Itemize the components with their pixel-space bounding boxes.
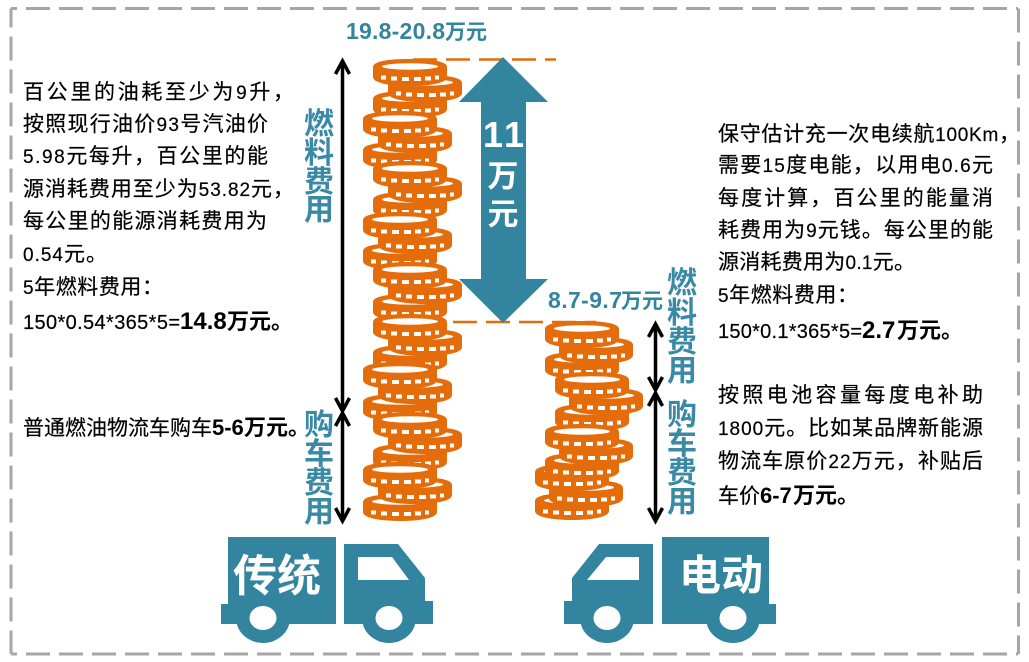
arrow: electric purchase cost xyxy=(648,393,662,521)
vertical label: traditional fuel cost xyxy=(304,108,334,227)
text block: electric purchase subsidy: 万元。 xyxy=(793,483,859,508)
text block: electric purchase subsidy: 按照电池容量每度电补助 xyxy=(718,384,983,407)
big double arrow: 11万元 difference: 11 xyxy=(483,114,527,155)
big double arrow: 11万元 difference xyxy=(459,57,548,323)
vertical label: electric fuel cost xyxy=(667,267,697,388)
text block: traditional purchase cost: 普通燃油物流车购车 xyxy=(23,417,212,440)
icon: electric truck xyxy=(564,537,776,643)
big double arrow: 11万元 difference: 元 xyxy=(488,197,518,232)
vertical label: electric purchase cost: 购 xyxy=(667,399,697,432)
icon: electric truck: 电动 xyxy=(679,552,763,599)
text block: traditional fuel cost explanation: 万元。 xyxy=(227,309,293,334)
text block: electric fuel cost explanation: 万元。 xyxy=(897,318,963,343)
text block: traditional purchase cost xyxy=(23,415,310,440)
text block: electric fuel cost explanation: 需要15度电能，以用电0.6元 xyxy=(718,154,993,177)
vertical label: electric fuel cost: 燃 xyxy=(667,267,697,300)
vertical label: traditional fuel cost: 料 xyxy=(304,137,334,170)
text block: electric purchase subsidy: 6-7 xyxy=(760,483,792,508)
text block: electric fuel cost explanation: 源消耗费用为0.1元。 xyxy=(718,251,915,274)
vertical label: electric fuel cost: 费 xyxy=(667,326,697,359)
text block: electric fuel cost explanation xyxy=(718,123,1020,344)
total label: electric: 8.7-9.7 xyxy=(548,287,622,313)
text block: electric fuel cost explanation: 保守估计充一次电续航100Km， xyxy=(718,123,1020,146)
text block: electric fuel cost explanation: 耗费用为9元钱。每公里的能 xyxy=(718,219,993,242)
text block: traditional fuel cost explanation: 百公里的油耗至少为9升， xyxy=(23,81,294,104)
coin stack: electric truck xyxy=(535,321,643,520)
arrow: traditional purchase cost xyxy=(336,413,350,521)
total label: electric: 万元 xyxy=(621,290,663,313)
icon: traditional truck xyxy=(221,537,433,643)
total label: traditional: 万元 xyxy=(445,21,487,44)
total label: traditional: 19.8-20.8 xyxy=(346,18,445,44)
vertical label: traditional purchase cost: 购 xyxy=(304,409,334,442)
text block: traditional fuel cost explanation: 5.98元每升，百公里的能 xyxy=(23,145,268,168)
vertical label: traditional purchase cost xyxy=(304,409,334,529)
text block: traditional fuel cost explanation: 0.54元。 xyxy=(23,243,107,266)
text block: electric purchase subsidy xyxy=(718,384,983,508)
orange dashed reference lines xyxy=(413,60,596,322)
text block: traditional fuel cost explanation: 14.8 xyxy=(180,308,227,335)
text block: traditional fuel cost explanation: 每公里的能源消耗费用为 xyxy=(23,210,267,233)
text block: traditional purchase cost: 5-6 xyxy=(212,415,244,440)
text block: traditional fuel cost explanation: 源消耗费用至少为53.82元， xyxy=(23,178,294,201)
text block: electric purchase subsidy: 1800元。比如某品牌新能源 xyxy=(718,417,983,440)
vertical label: electric purchase cost xyxy=(667,399,697,519)
vertical label: traditional fuel cost: 用 xyxy=(304,194,334,227)
vertical label: traditional purchase cost: 费 xyxy=(304,467,334,500)
text block: traditional fuel cost explanation: 150*0.54*365*5= xyxy=(23,312,180,334)
coin stack: traditional truck xyxy=(363,59,462,521)
icon: traditional truck: 传统 xyxy=(233,552,321,601)
text block: traditional fuel cost explanation: 按照现行油价93号汽油价 xyxy=(23,113,268,136)
vertical label: traditional fuel cost: 燃 xyxy=(304,108,334,141)
text block: electric purchase subsidy: 车价 xyxy=(718,485,760,508)
vertical label: traditional purchase cost: 用 xyxy=(304,496,334,529)
vertical label: electric purchase cost: 费 xyxy=(667,457,697,490)
text block: electric purchase subsidy: 物流车原价22万元，补贴后 xyxy=(718,450,983,473)
vertical label: traditional fuel cost: 费 xyxy=(304,166,334,199)
vertical label: traditional purchase cost: 车 xyxy=(304,438,334,471)
text block: traditional purchase cost: 万元。 xyxy=(244,415,310,440)
vertical label: electric fuel cost: 料 xyxy=(667,297,697,330)
vertical label: electric fuel cost: 用 xyxy=(667,355,697,388)
vertical label: electric purchase cost: 车 xyxy=(667,428,697,461)
text block: electric fuel cost explanation: 5年燃料费用： xyxy=(718,284,858,307)
text block: electric fuel cost explanation: 每度计算，百公里的能量消 xyxy=(718,187,993,210)
big double arrow: 11万元 difference: 万 xyxy=(488,159,518,194)
arrow: traditional fuel cost xyxy=(336,61,350,411)
vertical label: electric purchase cost: 用 xyxy=(667,486,697,519)
text block: electric fuel cost explanation: 2.7 xyxy=(862,317,895,344)
text block: traditional fuel cost explanation xyxy=(23,81,294,335)
text block: traditional fuel cost explanation: 5年燃料费用： xyxy=(23,276,163,299)
arrow: electric fuel cost xyxy=(648,324,662,390)
text block: electric fuel cost explanation: 150*0.1*365*5= xyxy=(718,321,862,343)
